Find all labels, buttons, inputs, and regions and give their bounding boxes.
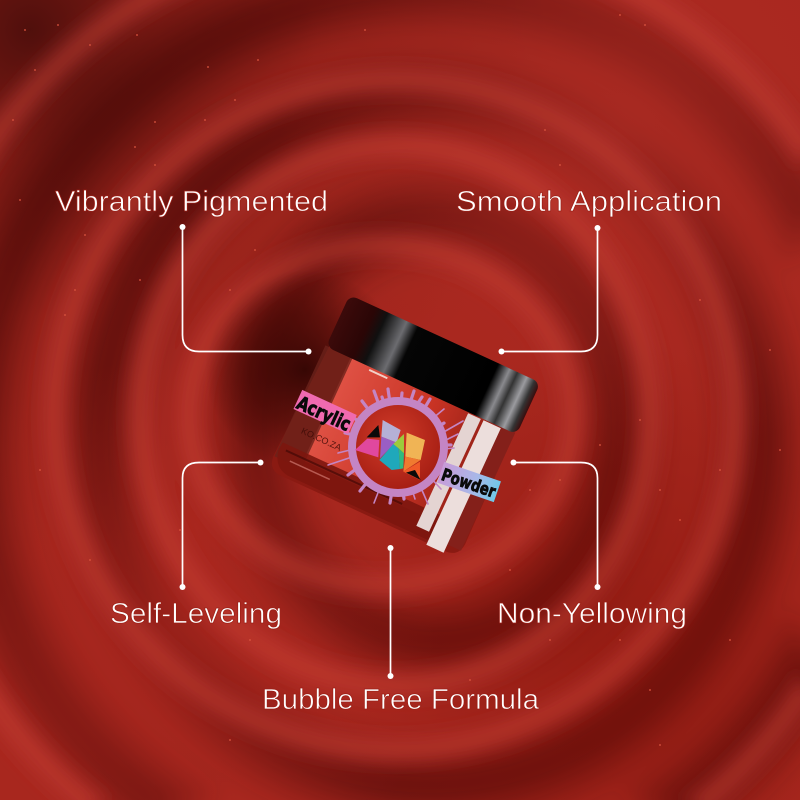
callout: Smooth Application bbox=[456, 186, 722, 354]
jar body and contents bbox=[266, 294, 541, 560]
white label stripes bbox=[411, 413, 501, 553]
callout: Smooth Application: Smooth Application bbox=[456, 186, 722, 218]
callout: Vibrantly Pigmented: Vibrantly Pigmented bbox=[55, 186, 328, 218]
product: acrylic powder jar bbox=[266, 294, 541, 560]
callout: Bubble Free Formula bbox=[262, 545, 540, 716]
label band: Powder bbox=[437, 462, 501, 503]
callout: Non-Yellowing: Non-Yellowing bbox=[497, 598, 687, 630]
jar lid bbox=[326, 295, 541, 434]
label band: Acrylic: Acrylic bbox=[293, 392, 354, 436]
callout: Vibrantly Pigmented bbox=[55, 186, 328, 354]
callout: Bubble Free Formula: Bubble Free Formula bbox=[262, 684, 540, 716]
logo: coloured facets bbox=[355, 420, 425, 480]
callout: Self-Leveling bbox=[110, 460, 282, 630]
label band: Powder: Powder bbox=[439, 465, 499, 503]
side label text: KO.CO.ZA bbox=[300, 426, 343, 453]
logo splash ring bbox=[328, 389, 463, 504]
callout: Self-Leveling: Self-Leveling bbox=[110, 598, 282, 630]
callout: Non-Yellowing bbox=[497, 460, 687, 630]
